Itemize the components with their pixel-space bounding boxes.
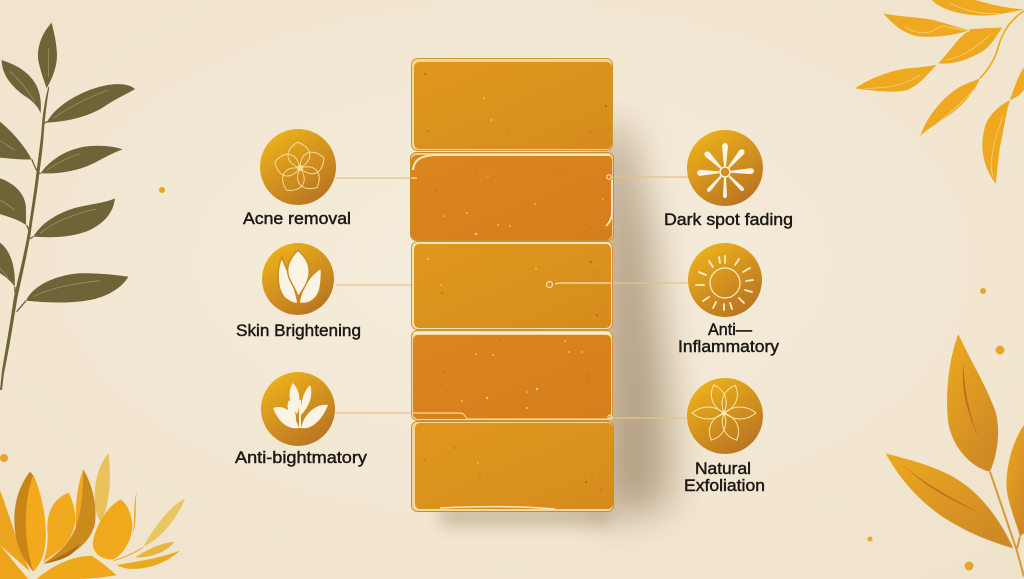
benefit: skin brightening [236,243,361,340]
benefit: dark spot fading [664,130,793,229]
icon: sun [688,243,762,317]
benefit: anti-inflammatory [678,243,780,356]
plant: olive branch top left [0,23,135,390]
label: Acne removal [243,210,351,228]
icon: white sprout [261,372,335,446]
label: Skin Brightening [236,322,361,340]
soap bar 1 [412,58,612,150]
benefit: natural exfoliation [684,378,765,495]
icon: radiating spokes [687,130,763,206]
speckles light [427,97,604,464]
icon: six petal outline [687,378,763,454]
soap shadow [440,125,670,525]
benefit: natural exfoliation: Exfoliation [684,477,765,495]
soap bar 2 [410,152,614,240]
soap stack [410,58,614,512]
plant: orange branch top right [855,0,1024,184]
benefit: anti-inflammatory: Inflammatory [678,338,780,356]
anchor markers on soap [411,175,612,419]
soap bar 3 [412,242,612,330]
label: Anti— [708,321,752,339]
label: Anti-bightmatory [235,449,368,467]
icon: flower outline [260,129,336,205]
benefit: acne removal [243,129,351,228]
label: Dark spot fading [664,211,793,229]
connector lines [335,177,689,418]
soap bar 5 [412,422,614,512]
label: Natural [695,460,751,478]
icon: white lotus leaves [262,243,334,315]
plant: yellow flower bottom left [0,453,185,579]
speckles dark [424,73,607,491]
decorative dots [0,187,1004,570]
plant: orange leaves bottom right [886,334,1024,577]
soap bar 4 [412,330,612,420]
benefit: anti-brightmatory [235,372,368,467]
